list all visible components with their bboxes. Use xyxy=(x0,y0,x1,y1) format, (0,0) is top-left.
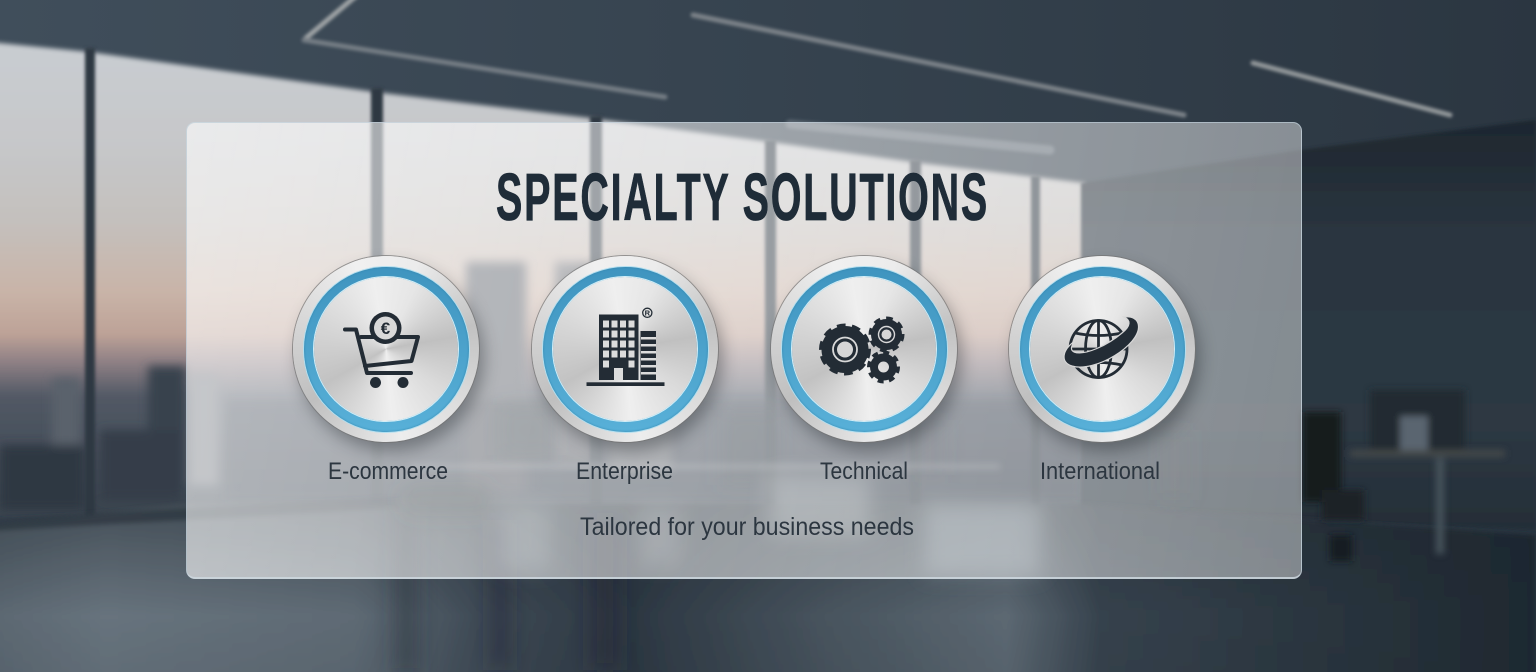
label: International: International xyxy=(1040,458,1160,485)
floor reflections xyxy=(395,505,620,672)
heading: Specialty Solutions: SPECIALTY SOLUTIONS xyxy=(496,160,989,235)
icon: shopping cart with euro coin xyxy=(343,312,420,388)
ceiling lights xyxy=(304,0,1450,150)
icon: office building xyxy=(586,308,664,386)
icon: globe with orbit xyxy=(1064,317,1139,379)
city skyline xyxy=(0,262,1080,510)
icon: three gears xyxy=(819,316,904,384)
label: Technical: Technical xyxy=(820,458,908,485)
label: Enterprise: Enterprise xyxy=(576,458,673,485)
card: E-commerce xyxy=(293,256,479,442)
icon: office building: R xyxy=(645,309,651,318)
window mullions xyxy=(85,48,1040,526)
label: E-commerce: E-commerce xyxy=(328,458,448,485)
tagline: Tailored for your business needs xyxy=(580,513,914,541)
card: International xyxy=(1009,256,1195,442)
floor xyxy=(0,496,1536,672)
office furniture xyxy=(400,405,1190,575)
windows xyxy=(0,41,1085,520)
icon: shopping cart with euro coin: € xyxy=(381,319,391,338)
card: Enterprise xyxy=(532,256,718,442)
panel: frosted glass card xyxy=(186,122,1302,579)
right wall xyxy=(1081,120,1536,530)
card: Technical xyxy=(771,256,957,442)
